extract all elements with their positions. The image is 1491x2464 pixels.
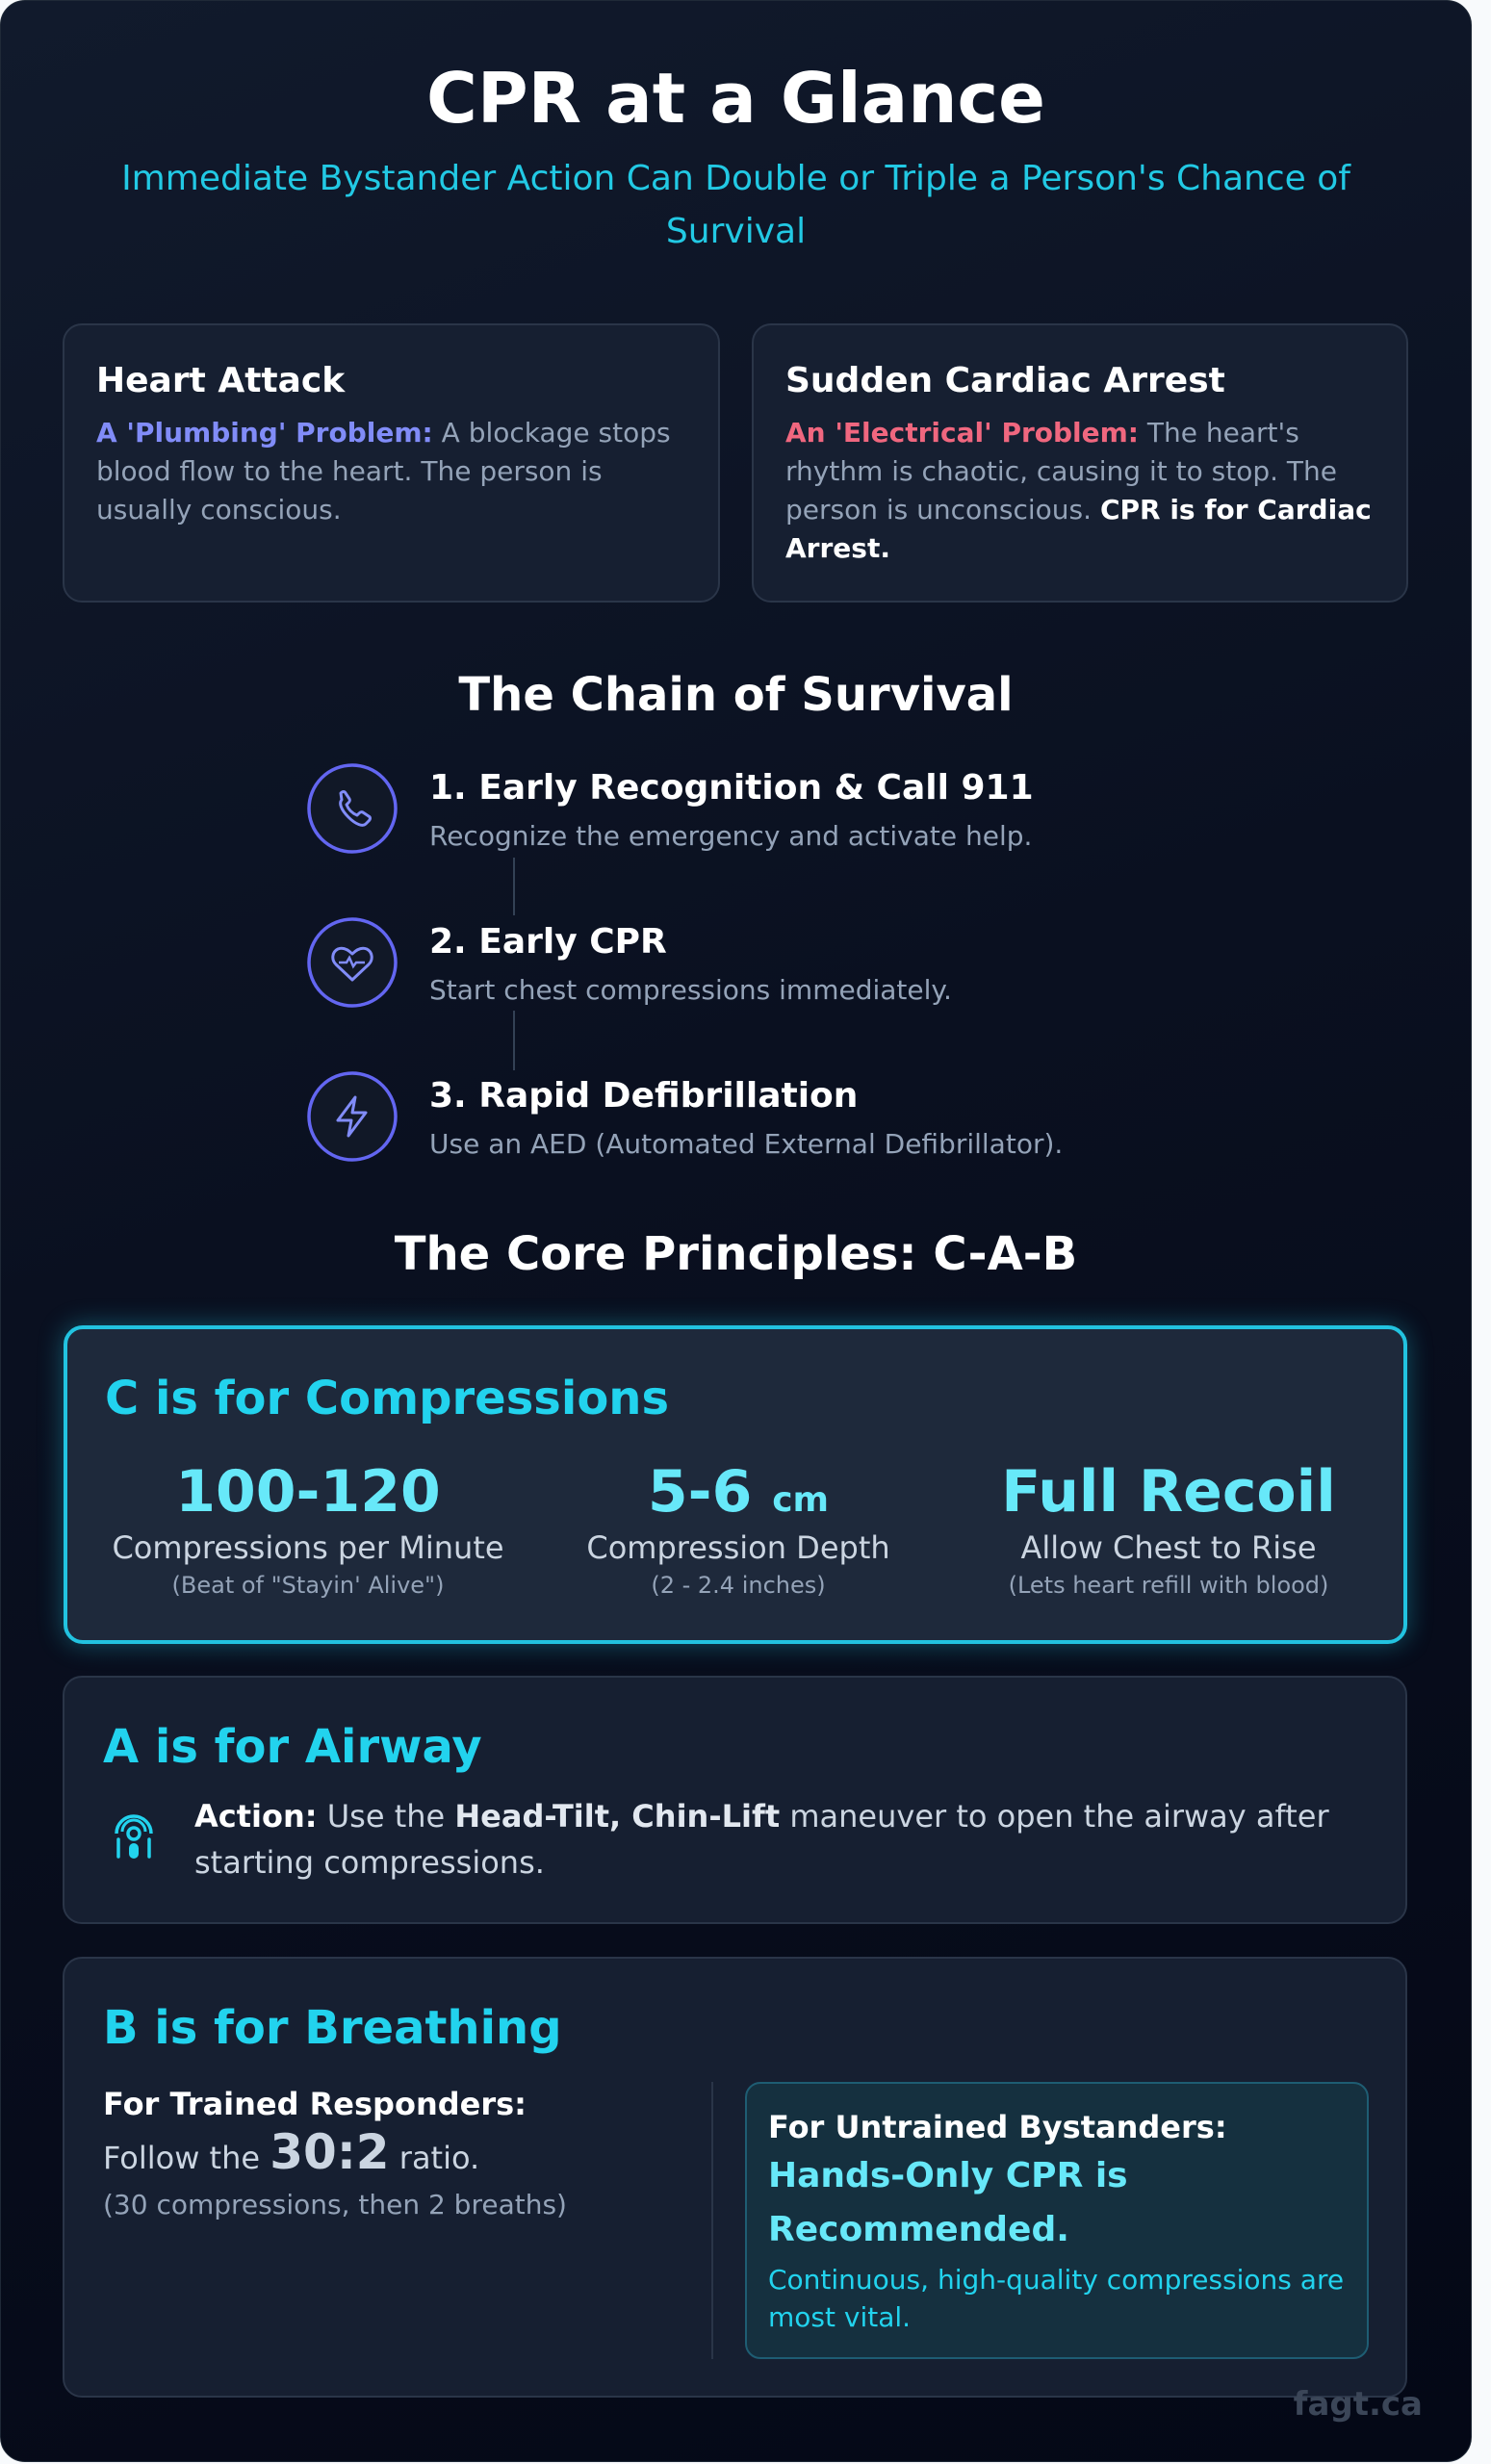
trained responders: (30 compressions, then 2 breaths) <box>103 2189 567 2220</box>
stat: recoil <box>1001 1458 1336 1599</box>
watermark: fagt.ca <box>1294 2385 1423 2424</box>
step 2 <box>307 917 952 1008</box>
title: CPR at a Glance <box>426 58 1045 139</box>
callout: untrained bystanders: Hands-Only CPR is Recommended. <box>768 2156 1128 2249</box>
panel: airway: A is for Airway <box>103 1720 482 1774</box>
panel: heart attack: Heart Attack <box>96 361 345 400</box>
panel: airway: Action: Use the Head-Tilt, Chin-Lift maneuver to open the airway after starting compressions. <box>194 1798 1329 1881</box>
icon: airway person <box>115 1814 153 1859</box>
panel: heart attack: A 'Plumbing' Problem: A blockage stops blood flow to the heart. The person is usually conscious. <box>96 417 671 526</box>
step 1: 1. Early Recognition & Call 911 <box>429 768 1034 808</box>
step 2: Start chest compressions immediately. <box>429 974 952 1006</box>
stat: depth: (2 - 2.4 inches) <box>651 1572 826 1599</box>
panel: compressions <box>64 1325 1407 1644</box>
stat: recoil: Full Recoil <box>1001 1458 1336 1526</box>
stat: rate: (Beat of "Stayin' Alive") <box>172 1572 444 1599</box>
panel: breathing: B is for Breathing <box>103 2001 562 2055</box>
stat: depth <box>586 1458 890 1599</box>
panel: compressions: C is for Compressions <box>105 1372 669 1425</box>
icon: phone <box>307 763 398 854</box>
panel: breathing <box>63 1957 1407 2398</box>
stat: rate: 100-120 <box>175 1458 441 1526</box>
panel: sudden cardiac arrest <box>752 323 1408 603</box>
connector lines <box>513 858 515 915</box>
step 1: Recognize the emergency and activate help. <box>429 820 1032 852</box>
subtitle: Immediate Bystander Action Can Double or Triple a Person's Chance of Survival <box>121 159 1350 251</box>
step 3 <box>307 1071 1063 1162</box>
step 2: 2. Early CPR <box>429 922 667 962</box>
stat: recoil: (Lets heart refill with blood) <box>1009 1572 1328 1599</box>
trained responders: For Trained Responders: <box>103 2086 527 2122</box>
step 3: 3. Rapid Defibrillation <box>429 1076 858 1116</box>
panel: sudden cardiac arrest: Sudden Cardiac Arrest <box>785 361 1225 400</box>
callout: untrained bystanders: Continuous, high-quality compressions are most vital. <box>768 2264 1344 2333</box>
stat: rate: Compressions per Minute <box>112 1529 504 1566</box>
stat: depth: 5-6 cm <box>648 1458 829 1526</box>
stat: recoil: Allow Chest to Rise <box>1020 1529 1317 1566</box>
icon: lightning <box>307 1071 398 1162</box>
stat: depth: Compression Depth <box>586 1529 890 1566</box>
panel: airway <box>63 1676 1407 1924</box>
heading: chain of survival: The Chain of Survival <box>458 668 1014 722</box>
step 1 <box>307 763 1034 854</box>
step 3: Use an AED (Automated External Defibrillator). <box>429 1128 1063 1160</box>
callout: untrained bystanders: For Untrained Bystanders: <box>768 2109 1227 2145</box>
trained responders: Follow the 30:2 ratio. <box>103 2124 479 2180</box>
callout: untrained bystanders <box>745 2082 1369 2359</box>
icon: heart <box>307 917 398 1008</box>
panel: sudden cardiac arrest: An 'Electrical' Problem: The heart's rhythm is chaotic, causing it to stop. The person is unconscious. CPR is for Cardiac Arrest. <box>785 417 1372 564</box>
heading: core principles: The Core Principles: C-A-B <box>395 1227 1077 1281</box>
panel: heart attack <box>63 323 720 603</box>
trained responders <box>103 2086 567 2220</box>
stat: rate <box>112 1458 504 1599</box>
